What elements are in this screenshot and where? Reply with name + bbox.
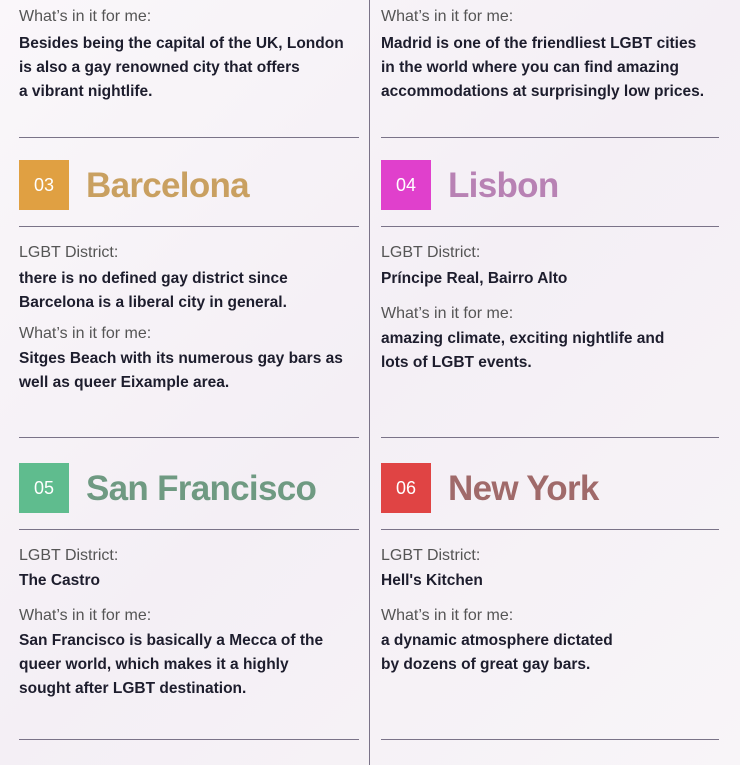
panel: London (19, 8, 344, 100)
panel: Barcelona (19, 160, 359, 391)
text: San Francisco is basically a Mecca of the (19, 632, 323, 649)
label: what's in it: What’s in it for me: (19, 8, 151, 25)
badge 05 (19, 463, 69, 513)
heading Lisbon: Lisbon (448, 166, 559, 205)
text: sought after LGBT destination. (19, 680, 246, 697)
text district (19, 270, 288, 311)
label what's in it: What’s in it for me: (19, 607, 151, 624)
text: Madrid (381, 35, 704, 100)
label what's in it: What’s in it for me: (381, 305, 513, 322)
badge 06 (381, 463, 431, 513)
text district: there is no defined gay district since (19, 270, 288, 287)
text: amazing climate, exciting nightlife and (381, 330, 664, 347)
text (19, 350, 343, 391)
badge 04 (381, 160, 431, 210)
panel: Lisbon (381, 160, 719, 371)
heading Barcelona: Barcelona (86, 166, 249, 205)
heading New York: New York (448, 469, 599, 508)
panel: Madrid (381, 8, 704, 100)
label district: LGBT District: (381, 244, 480, 261)
text (381, 632, 613, 673)
text district: Barcelona is a liberal city in general. (19, 294, 287, 311)
text: London: Besides being the capital of the UK, London (19, 35, 344, 52)
text: London: a vibrant nightlife. (19, 83, 152, 100)
text: lots of LGBT events. (381, 354, 532, 371)
text: Madrid: accommodations at surprisingly low prices. (381, 83, 704, 100)
label district: LGBT District: (19, 547, 118, 564)
heading San Francisco: San Francisco (86, 469, 316, 508)
label what's in it: What’s in it for me: (381, 607, 513, 624)
text: a dynamic atmosphere dictated (381, 632, 613, 649)
panel: San Francisco (19, 463, 359, 697)
text (19, 632, 323, 697)
badge 04: 04 (396, 175, 416, 195)
text district: The Castro (19, 572, 100, 589)
label what's in it: What’s in it for me: (19, 325, 151, 342)
label district: LGBT District: (381, 547, 480, 564)
badge 03 (19, 160, 69, 210)
badge 06: 06 (396, 478, 416, 498)
label: what's in it: What’s in it for me: (381, 8, 513, 25)
text: Madrid: in the world where you can find amazing (381, 59, 679, 76)
text district: Príncipe Real, Bairro Alto (381, 270, 567, 287)
text: Sitges Beach with its numerous gay bars as (19, 350, 343, 367)
text: London: is also a gay renowned city that offers (19, 59, 300, 76)
label district: LGBT District: (19, 244, 118, 261)
badge 03: 03 (34, 175, 54, 195)
text district: Hell's Kitchen (381, 572, 483, 589)
text: London (19, 35, 344, 100)
badge 05: 05 (34, 478, 54, 498)
text: Madrid: Madrid is one of the friendliest LGBT cities (381, 35, 696, 52)
text (381, 330, 664, 371)
text: well as queer Eixample area. (19, 374, 229, 391)
panel: New York (381, 463, 719, 673)
text: queer world, which makes it a highly (19, 656, 289, 673)
text: by dozens of great gay bars. (381, 656, 590, 673)
